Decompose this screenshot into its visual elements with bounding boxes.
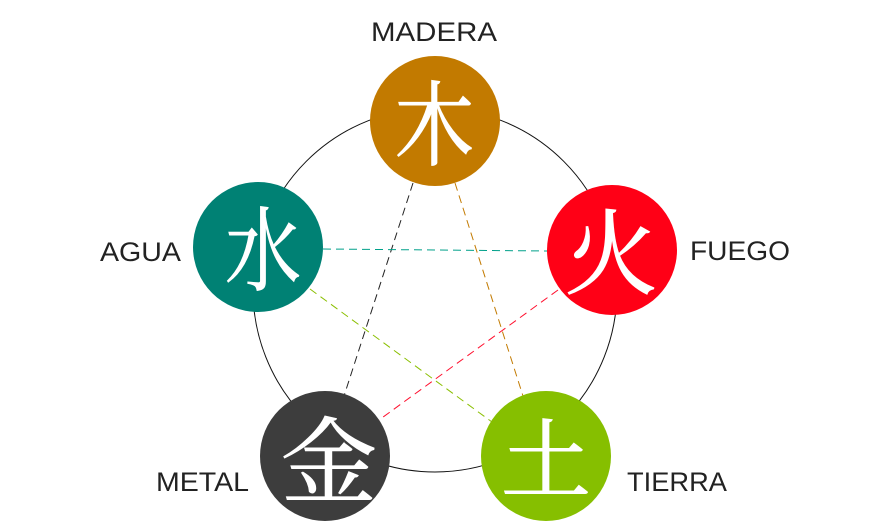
node: agua xyxy=(193,178,323,312)
dashed connector: agua to tierra xyxy=(310,289,492,422)
label: fuego: FUEGO xyxy=(690,236,790,266)
dashed connector: madera to metal xyxy=(344,183,413,396)
node: metal: 金 xyxy=(281,389,377,522)
node: agua: 水 xyxy=(225,178,301,309)
dashed connector: madera to tierra xyxy=(455,183,523,396)
label: madera: MADERA xyxy=(371,17,497,47)
node: tierra: 土 xyxy=(501,392,591,516)
node: madera: 木 xyxy=(395,52,474,185)
label: tierra: TIERRA xyxy=(627,467,727,497)
node: madera xyxy=(370,52,500,186)
label: metal: METAL xyxy=(156,467,249,497)
dashed connector: agua to fuego xyxy=(323,249,548,251)
node: tierra xyxy=(481,391,611,521)
node: fuego: 火 xyxy=(564,180,658,314)
dashed connector: fuego to metal xyxy=(379,290,558,420)
label: agua: AGUA xyxy=(100,237,181,267)
outer cycle ring xyxy=(253,108,617,472)
